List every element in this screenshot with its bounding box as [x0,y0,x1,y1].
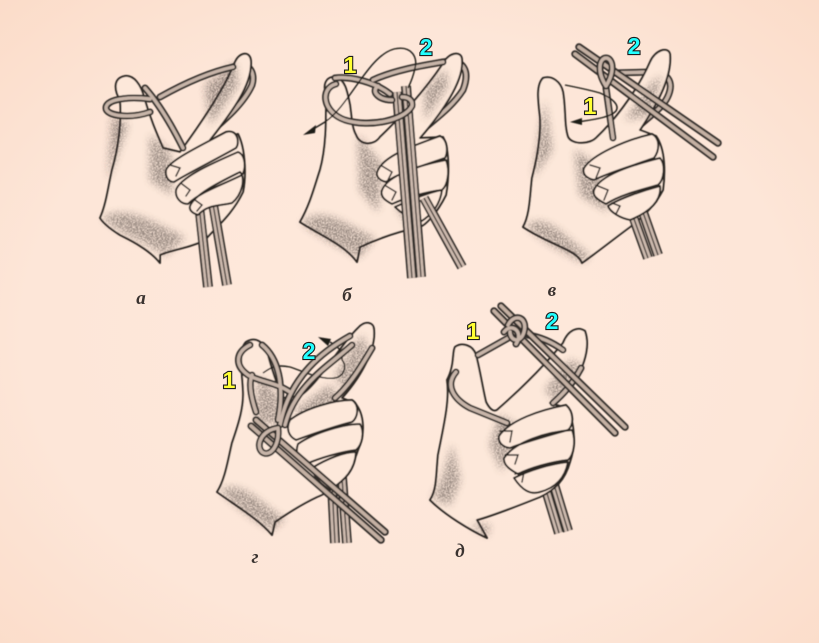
knitting needles [251,420,385,540]
palm shading [102,62,238,255]
knitting needles [575,47,718,157]
rope loop on thumb [451,372,507,423]
loop and upper strands [326,62,443,123]
cord strands [629,201,658,258]
loop and upper strands [106,67,233,148]
cord strands [397,86,462,278]
hand outline [430,329,587,538]
arrowhead [570,118,582,125]
label 1, panel b: 1 [344,52,357,78]
nails [382,166,396,200]
knot on needles [504,318,525,344]
hand v: needles with loop [523,47,718,263]
label 2, panel d: 2 [546,308,558,334]
fingers [288,400,363,490]
hand a: loop on thumb and index finger [100,54,253,287]
palm shading [432,360,582,536]
arrowhead [318,337,331,346]
thread arrow [565,85,617,122]
nails [170,165,202,211]
cord strands [199,198,227,287]
knitting needles [494,306,625,433]
loop on needles [259,428,278,453]
loop on needles [600,58,612,86]
upper strands [478,335,581,403]
thread arrow [310,48,416,131]
caption a: а [136,288,146,309]
caption v: в [548,280,557,301]
hand outline [217,323,374,535]
fingers [377,136,448,222]
label 2, panel g: 2 [303,338,315,364]
hand g: needles in front of palm [217,323,385,543]
fingers [583,134,664,220]
caption d: д [455,541,465,562]
label 2, panel b: 2 [420,34,432,60]
label 1, panel g: 1 [223,367,236,393]
label 1, panel d: 1 [467,318,480,344]
cord strands [540,468,568,533]
thread arrow [263,342,345,378]
rope behind index finger [207,65,253,135]
label 2, panel v: 2 [628,33,640,59]
fingers [499,405,574,493]
loops and strands [238,336,352,425]
cord strands [331,465,347,543]
rope behind index finger [417,61,466,135]
palm shading [302,70,448,258]
hand outline [523,50,670,263]
caption b: б [342,285,353,306]
arrowhead [303,125,316,135]
caption g: г [251,547,259,568]
hand outline [100,54,251,263]
palm shading [220,335,368,530]
hand b: loop, thread arrow and cord [300,48,466,278]
nails [590,165,620,214]
strand from loop [606,88,613,138]
label 1, panel v: 1 [584,93,597,119]
hand outline [300,54,462,262]
palm shading [526,75,662,262]
hand d: finished loop on needles [430,306,625,538]
fingers [166,132,245,215]
rope behind index finger [613,72,670,125]
nails [500,431,524,482]
rope along index finger [335,348,372,398]
